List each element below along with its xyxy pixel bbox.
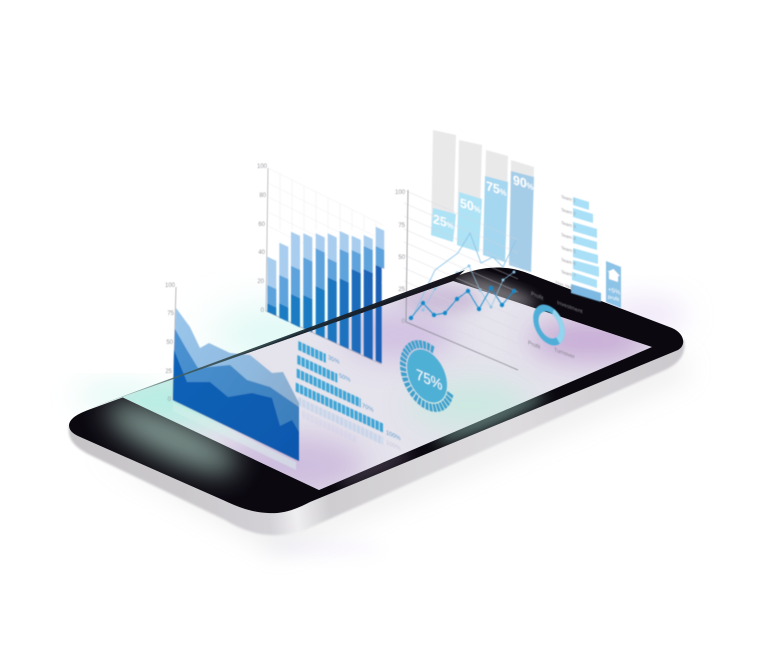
donut chart: Profit	[528, 340, 541, 351]
team labels: This Year	[555, 280, 574, 291]
progress labels: 70%	[362, 402, 374, 414]
donut chart: Investment	[557, 300, 583, 316]
team bar chart	[555, 194, 621, 308]
axis labels: 100	[395, 190, 406, 196]
gauge 75%: 75%	[416, 367, 442, 394]
segmented progress bars	[296, 346, 401, 453]
profit card: +5%	[608, 286, 621, 297]
team labels: Team 4	[561, 232, 576, 242]
bar axis labels: 20	[257, 279, 265, 285]
mid line	[422, 265, 515, 311]
area axis labels	[165, 283, 176, 403]
bars	[267, 257, 276, 316]
progress labels	[328, 354, 401, 453]
axis labels: 0	[402, 319, 406, 325]
bar axis labels: 80	[259, 193, 267, 199]
phone shadow	[90, 352, 690, 552]
phone top edge over charts	[88, 270, 465, 409]
area chart	[165, 283, 299, 461]
bar axis labels: 100	[257, 164, 268, 170]
donut chart: Turnover	[554, 347, 575, 361]
area axis labels: 25	[165, 369, 173, 375]
phone body	[69, 340, 684, 535]
area axis labels: 100	[165, 283, 176, 289]
axis labels: 50	[398, 255, 406, 261]
percent labels	[433, 172, 533, 232]
phone with floating charts illustration	[68, 130, 686, 558]
area axis labels: 50	[166, 340, 174, 346]
percent labels: 50%	[460, 195, 480, 216]
team labels: Team 6	[561, 257, 576, 267]
background glows	[75, 297, 687, 558]
area axis labels: 0	[168, 397, 172, 403]
light line	[411, 233, 516, 320]
progress labels: 35%	[328, 354, 340, 366]
bar axis labels: 40	[258, 250, 266, 256]
area axis labels: 75	[167, 311, 175, 317]
team labels: Team 2	[561, 207, 576, 217]
bar axis labels: 60	[258, 222, 266, 228]
gauge 75%	[403, 335, 450, 417]
team labels: Team 1	[561, 194, 576, 204]
progress labels: 100%	[386, 429, 401, 443]
axis labels	[395, 190, 406, 325]
percent labels: 75%	[486, 178, 506, 199]
donut chart	[528, 291, 583, 361]
bar axis labels: 0	[261, 308, 265, 314]
team labels: Team 3	[561, 220, 576, 230]
percent labels: 90%	[513, 172, 533, 193]
line chart	[395, 190, 518, 370]
progress labels: 100%	[386, 439, 401, 453]
bar axis labels	[257, 164, 268, 314]
profit card	[606, 261, 621, 308]
area chart floor reflection	[173, 403, 296, 470]
axis labels: 25	[398, 287, 406, 293]
phone screen	[122, 281, 652, 490]
donut chart: Profit	[531, 291, 544, 302]
dark line	[409, 286, 516, 320]
team labels	[555, 194, 576, 291]
team labels: Team 7	[561, 269, 576, 279]
team labels: Team 5	[561, 245, 576, 255]
stacked bar chart	[257, 164, 384, 365]
profit card: profit	[608, 294, 620, 303]
bar reflection	[298, 401, 383, 441]
phone face	[69, 268, 684, 514]
percent column chart	[431, 130, 534, 272]
axis labels: 75	[398, 223, 406, 229]
percent labels: 25%	[433, 211, 453, 232]
progress labels: 50%	[339, 372, 351, 384]
